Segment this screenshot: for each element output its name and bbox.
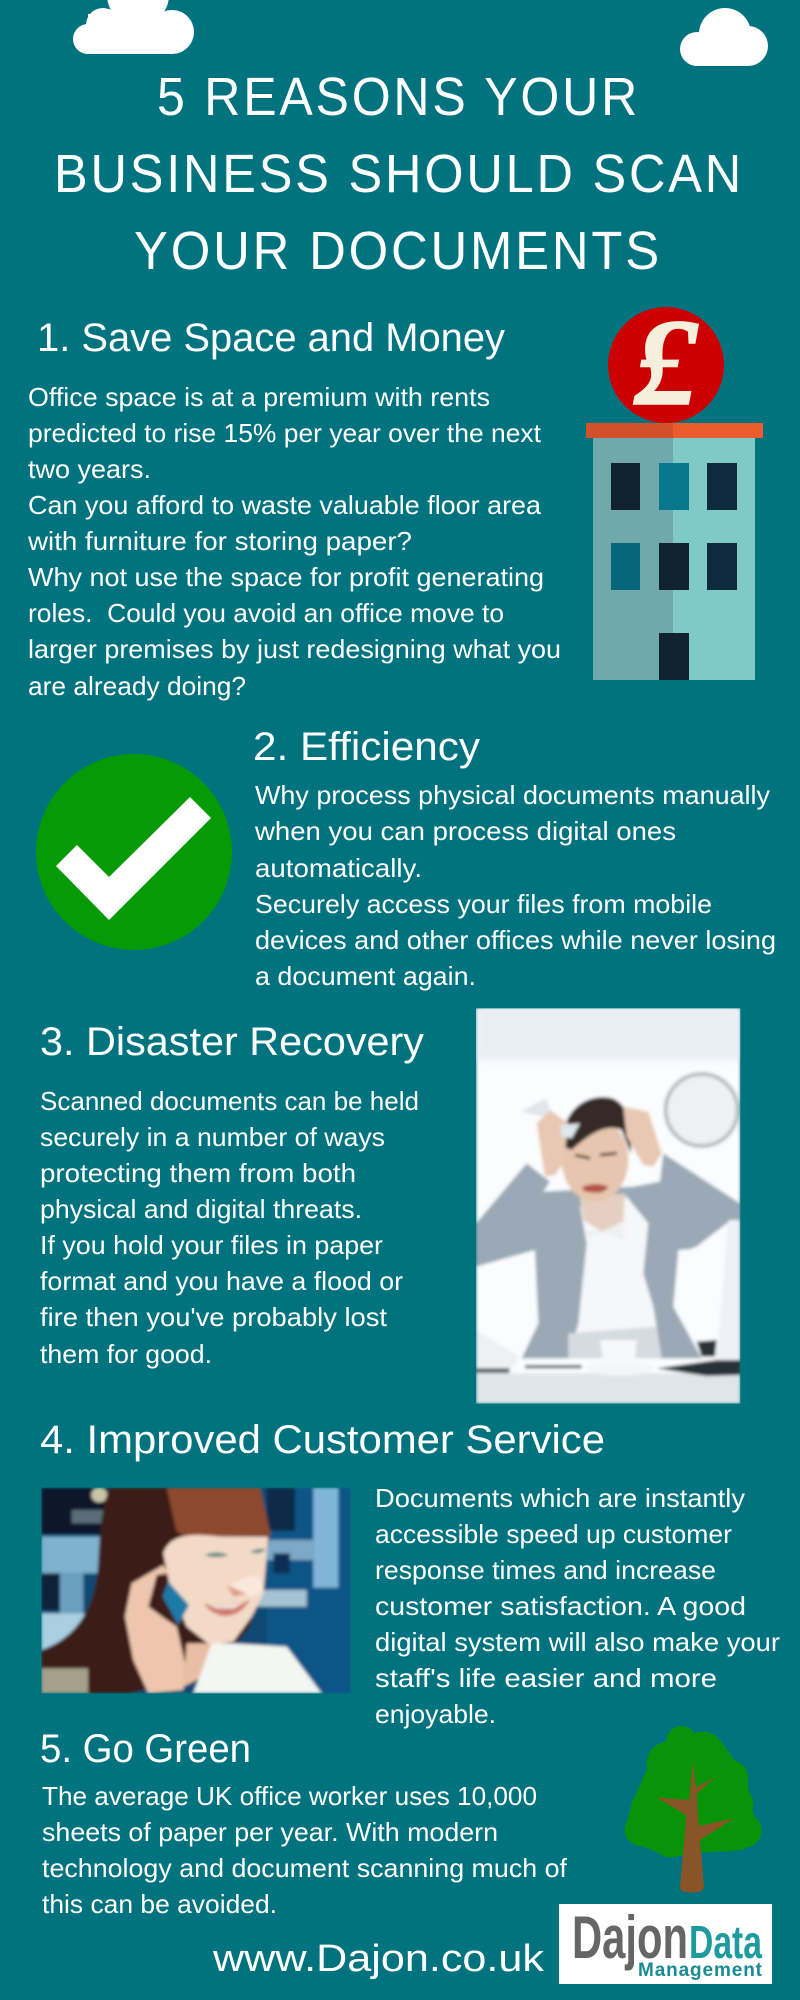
text block: section 1: predicted to rise 15% per year over the next	[28, 418, 542, 448]
text block: section 4: response times and increase	[375, 1555, 716, 1585]
text block: section 4: enjoyable.	[375, 1699, 496, 1729]
heading: section 3: 3. Disaster Recovery	[40, 1020, 424, 1064]
text block: section 4: accessible speed up customer	[375, 1519, 732, 1549]
panel: go green	[40, 1726, 762, 1919]
text block: section 5: sheets of paper per year. With modern	[42, 1817, 498, 1847]
text block: section 5: technology and document scanning much of	[42, 1853, 568, 1883]
panel: save space and money	[27, 294, 763, 701]
icon: tree	[625, 1726, 762, 1893]
heading: section 4: 4. Improved Customer Service	[40, 1418, 605, 1462]
panel: improved customer service	[40, 1418, 780, 1729]
text block: section 3: fire then you've probably lost	[40, 1302, 388, 1332]
text block: section 3: securely in a number of ways	[40, 1122, 385, 1152]
text block: section 3: Scanned documents can be held	[40, 1086, 419, 1116]
text block: section 4: Documents which are instantly	[375, 1483, 745, 1513]
text block: section 2: devices and other offices while never losing	[255, 925, 776, 955]
text block: section 5	[42, 1781, 568, 1919]
text block: section 1: Office space is at a premium with rents	[28, 382, 490, 412]
icon: cloud left	[73, 0, 194, 54]
text block: section 4: staff's life easier and more	[375, 1663, 717, 1693]
text block: section 5: this can be avoided.	[42, 1889, 277, 1919]
logo: Dajon Data Management: Management	[638, 1960, 763, 1981]
text block: section 4	[375, 1483, 780, 1729]
text block: section 2: Why process physical documents manually	[255, 780, 770, 810]
photo: stressed office worker	[476, 1003, 740, 1404]
logo: Dajon Data Management: Data	[689, 1916, 762, 1968]
panel: efficiency	[36, 725, 776, 991]
text block: section 1: are already doing?	[28, 671, 246, 701]
text block: section 3: them for good.	[40, 1339, 212, 1369]
title: YOUR DOCUMENTS	[134, 221, 662, 281]
panel: disaster recovery	[40, 1003, 740, 1404]
heading: section 2: 2. Efficiency	[253, 725, 480, 769]
text block: section 1: Why not use the space for profit generating	[28, 562, 544, 592]
text block: section 4: digital system will also make your	[375, 1627, 780, 1657]
text block: section 2: when you can process digital ones	[254, 816, 676, 846]
title: 5 REASONS YOUR	[157, 67, 640, 127]
text block: section 2: Securely access your files from mobile	[255, 889, 712, 919]
text block: section 1: roles. Could you avoid an office move to	[28, 598, 504, 628]
icon: green check mark	[36, 754, 232, 950]
heading: section 5: 5. Go Green	[40, 1727, 251, 1771]
text block: section 4: customer satisfaction. A good	[375, 1591, 746, 1621]
text block: section 1	[27, 382, 561, 701]
logo: Dajon Data Management	[559, 1904, 772, 1984]
text block: section 3: physical and digital threats.	[40, 1194, 362, 1224]
icon: office building with pound sign: £	[633, 294, 699, 431]
text block: section 3	[40, 1086, 419, 1369]
heading: section 1: 1. Save Space and Money	[37, 316, 505, 360]
icon: cloud right	[680, 8, 768, 66]
title: BUSINESS SHOULD SCAN	[54, 144, 744, 204]
text block: section 3: If you hold your files in paper	[40, 1230, 383, 1260]
text block: section 1: larger premises by just redesigning what you	[28, 634, 561, 664]
website url: www.Dajon.co.uk	[212, 1938, 545, 1980]
text block: section 2: a document again.	[255, 961, 476, 991]
text block: section 2: automatically.	[255, 853, 422, 883]
logo: Dajon Data Management: Dajon	[572, 1904, 688, 1971]
photo: woman on phone	[41, 1488, 351, 1693]
title	[54, 67, 744, 281]
text block: section 5: The average UK office worker uses 10,000	[42, 1781, 537, 1811]
text block: section 3: format and you have a flood or	[40, 1266, 403, 1296]
text block: section 1: with furniture for storing paper?	[27, 526, 412, 556]
text block: section 1: Can you afford to waste valuable floor area	[28, 490, 542, 520]
icon: office building with pound sign	[586, 294, 763, 680]
text block: section 2	[254, 780, 776, 991]
text block: section 3: protecting them from both	[40, 1158, 356, 1188]
text block: section 1: two years.	[28, 454, 151, 484]
